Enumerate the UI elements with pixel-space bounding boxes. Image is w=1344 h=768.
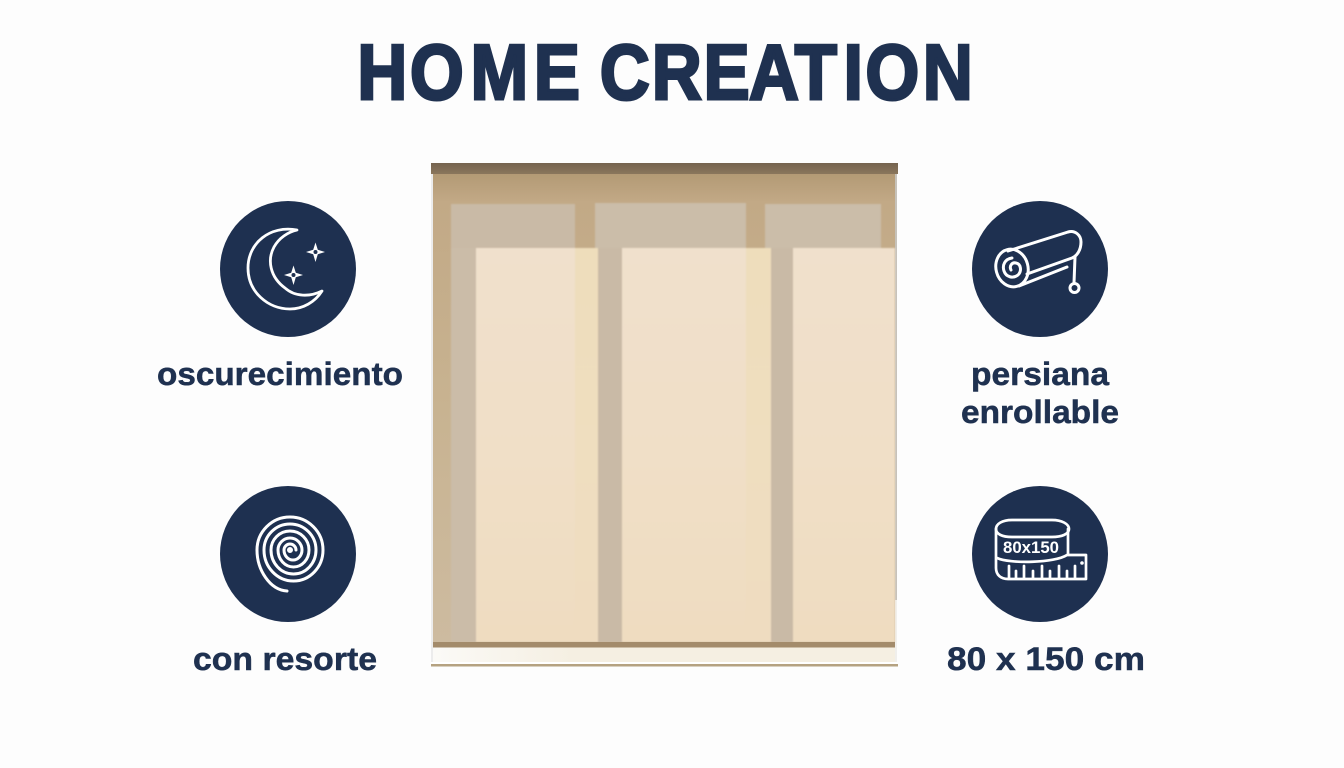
feature: con resorte: [193, 486, 377, 677]
icon: measuring tape: [972, 486, 1108, 622]
feature: persiana enrollable: enrollable: [961, 394, 1119, 430]
icon: spring coil: [220, 486, 356, 622]
title: HOME CREATION: [357, 28, 973, 116]
blind fabric: [433, 174, 895, 644]
icon: measuring tape: 80x150: [1003, 538, 1059, 557]
feature: oscurecimiento: [157, 201, 403, 392]
feature: 80 x 150 cm: [947, 486, 1145, 677]
icon: rolled blind: [972, 201, 1108, 337]
blind bottom bar: [431, 642, 898, 666]
blind side rails: [431, 170, 897, 664]
label: oscurecimiento: [157, 356, 403, 392]
blind head box: [431, 163, 898, 174]
roller blind: [431, 163, 898, 666]
feature: persiana enrollable: [961, 201, 1119, 430]
label: 80 x 150 cm: [947, 641, 1145, 677]
label: con resorte: [193, 641, 377, 677]
label: persiana: [971, 356, 1109, 392]
icon: moon and stars: [220, 201, 356, 337]
window light and mullion shadows: [451, 203, 895, 642]
